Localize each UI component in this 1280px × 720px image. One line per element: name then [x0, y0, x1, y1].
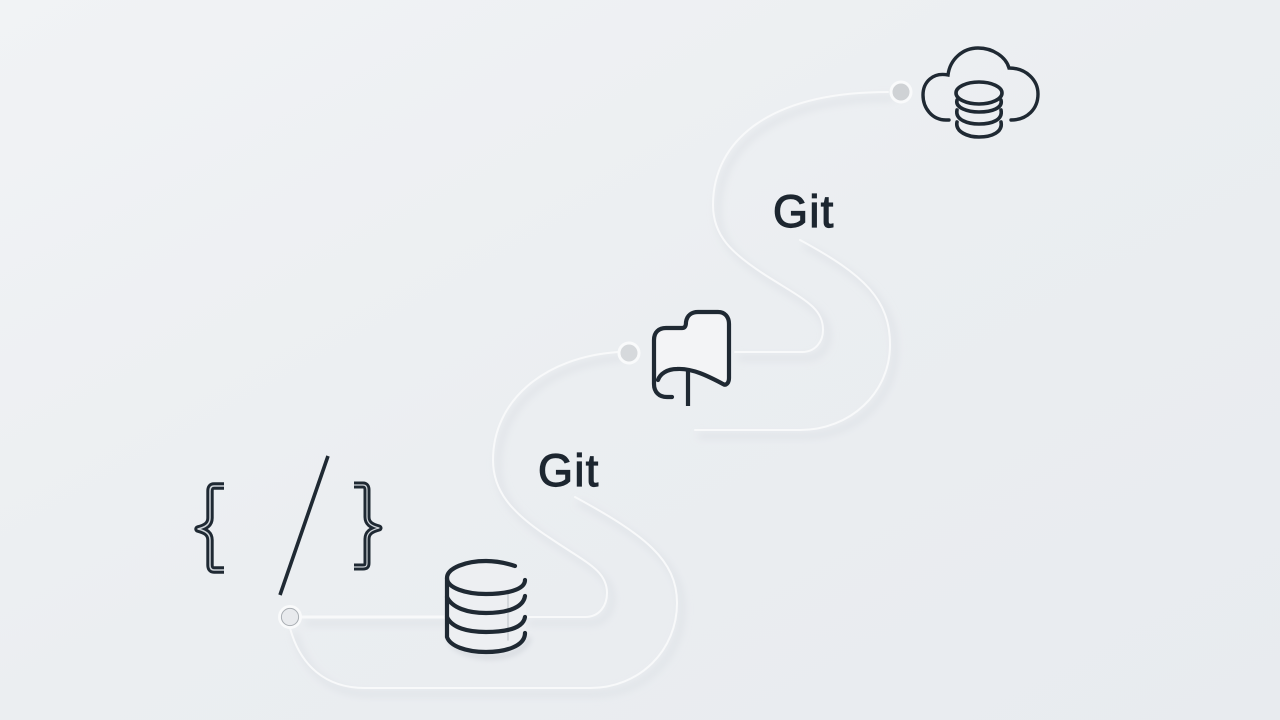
slash [280, 456, 328, 595]
database stack [956, 82, 1002, 137]
icon: code braces and slash [198, 456, 379, 595]
left brace [198, 486, 224, 570]
icon: cloud database [923, 48, 1038, 137]
node: start [280, 606, 300, 628]
node: middle [619, 343, 639, 363]
workflow path: lower loop [290, 352, 682, 694]
label: lower Git: Git [538, 445, 600, 496]
cloud outline [923, 48, 1038, 120]
label: upper Git: Git [773, 186, 835, 237]
icon: database [447, 561, 529, 657]
node: top [891, 82, 911, 102]
right brace [354, 485, 379, 567]
workflow path: upper loop [695, 92, 895, 436]
icon: flag [654, 312, 729, 406]
